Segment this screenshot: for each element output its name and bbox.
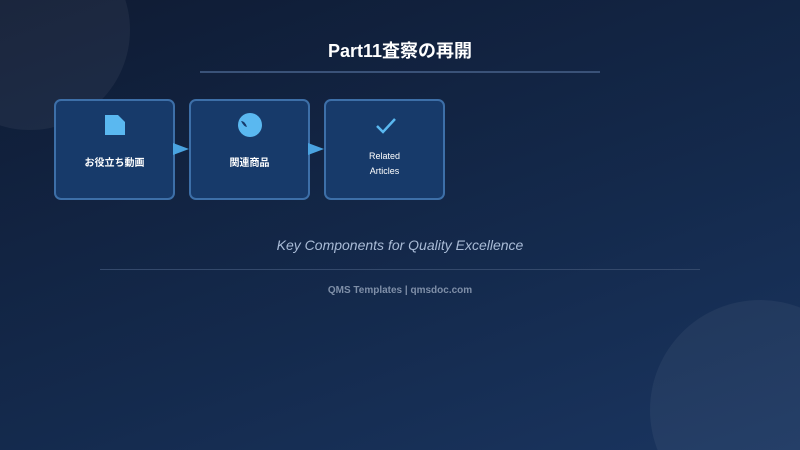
icon: check (376, 118, 396, 134)
icon: leaf circle (238, 113, 262, 137)
card: related articles (324, 99, 445, 200)
title: Part11査察の再開 (328, 41, 472, 61)
footer: QMS Templates | qmsdoc.com (328, 285, 472, 296)
card: related articles: Related (369, 151, 400, 161)
card: products: 関連商品 (230, 158, 270, 169)
icon: document (105, 115, 125, 135)
subtitle: Key Components for Quality Excellence (277, 237, 523, 253)
arrow 1 (173, 143, 189, 155)
card: video: お役立ち動画 (84, 158, 144, 169)
card: products (189, 99, 310, 200)
card: related articles: Articles (370, 166, 399, 176)
arrow 2 (308, 143, 324, 155)
card: video (54, 99, 175, 200)
